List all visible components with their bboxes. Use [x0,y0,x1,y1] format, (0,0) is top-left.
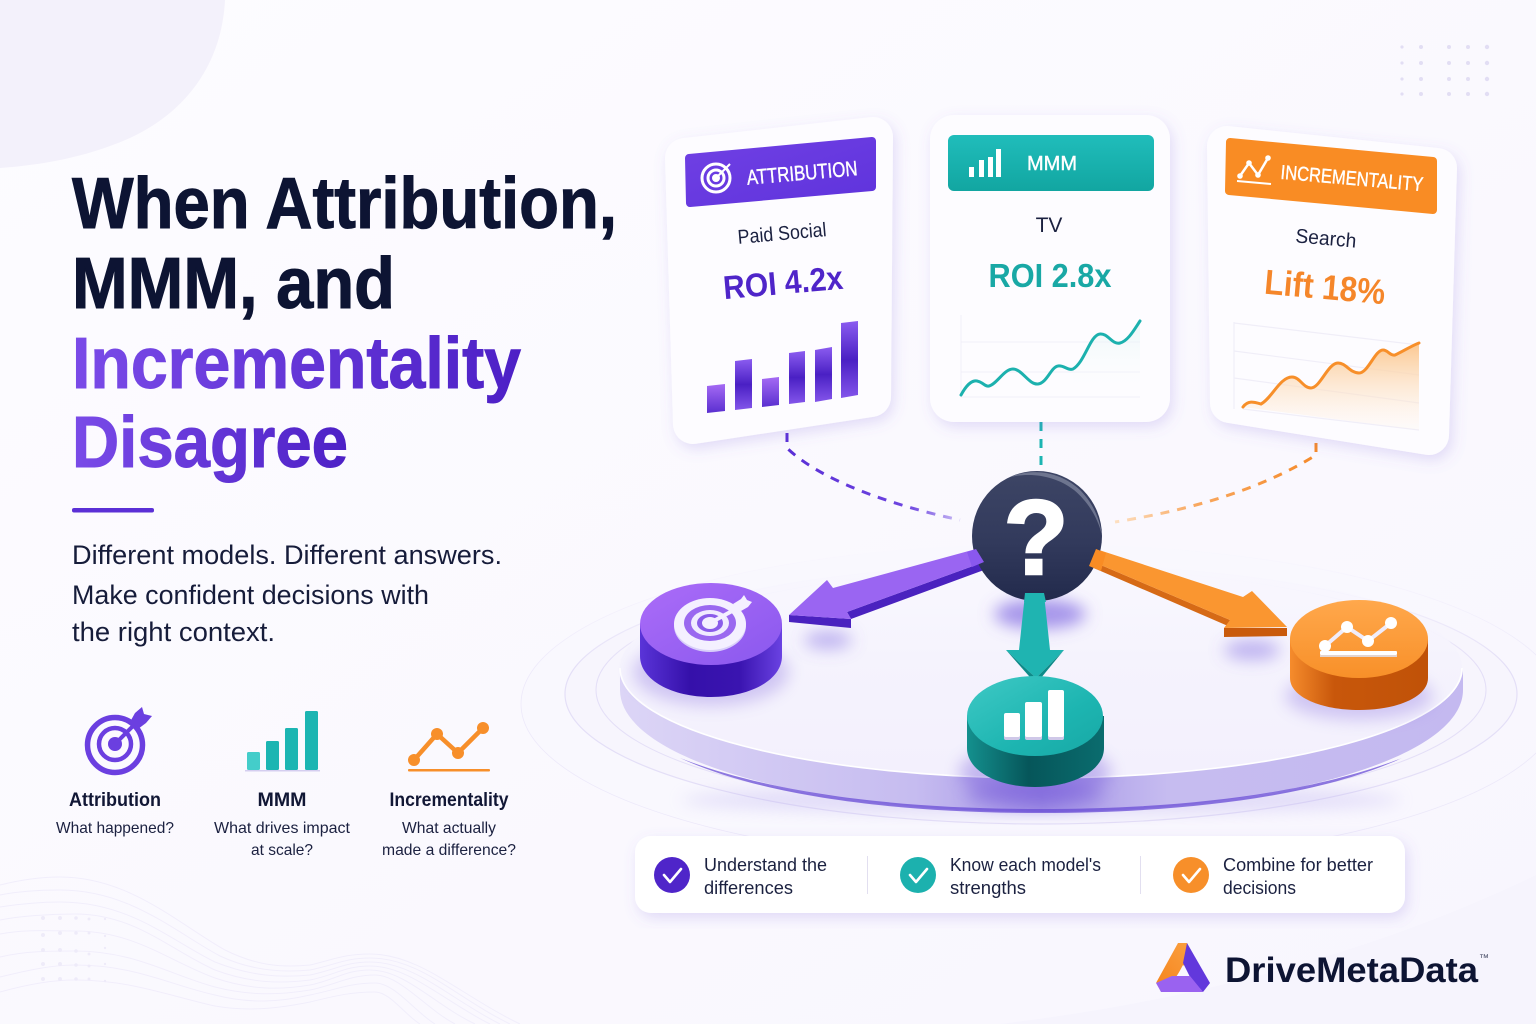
question mark: ? [1004,479,1068,597]
benefits panel [635,836,1405,913]
title: Incrementality [72,324,521,404]
node: mmm [959,676,1111,800]
benefit: combine: Combine for better [1223,855,1373,875]
header label: ATTRIBUTION [746,157,858,190]
header label: INCREMENTALITY [1280,162,1424,196]
label: Attribution [69,790,161,811]
metric: Lift 18% [1263,263,1387,312]
legend: attribution [56,707,174,837]
arrow shadows [804,599,1280,660]
arrow: orange [1089,549,1287,637]
card body [930,115,1170,422]
arrow: purple [789,549,984,628]
decorative wave lines [0,877,520,1024]
card body [685,137,873,424]
metric: ROI 4.2x [722,259,845,306]
card: attribution [685,137,873,424]
node: attribution [633,583,789,706]
logo mark [1156,943,1210,992]
title rule [72,508,154,512]
card header [1229,142,1433,210]
icon: line chart [408,722,490,772]
card body [1227,146,1437,435]
header icon: target [702,164,730,192]
description: What actually [402,820,496,837]
wordmark: DriveMetaData [1225,951,1479,990]
channel: Paid Social [737,219,827,249]
area chart [1234,322,1419,430]
benefit: strengths: strengths [950,878,1026,898]
subtitle text: the right context. [72,617,275,647]
node: incrementality [1285,600,1433,720]
card: mmm [930,115,1170,422]
title: Disagree [72,403,348,483]
legend: incrementality [382,722,516,859]
arrow stems over sphere edge [1024,593,1046,602]
card: incrementality [1227,142,1437,435]
icon: target [674,595,752,652]
decorative dot grid [1400,45,1489,96]
benefit: strengths [900,855,1101,898]
icon: bars [245,711,320,772]
benefit: understand [654,855,827,898]
connector dashes [787,422,1316,522]
bar chart [707,321,858,413]
benefit: strengths: Know each model's [950,855,1101,875]
question mark sphere [967,471,1106,602]
channel: TV [1036,214,1062,237]
header label: MMM [1027,153,1077,175]
card header [689,141,872,203]
subtitle text: Make confident decisions with [72,580,429,610]
platform [521,544,1536,864]
subtitle text: Different models. Different answers. [72,540,502,570]
description [214,820,351,859]
description: at scale? [251,842,313,859]
icon: line chart [1319,617,1397,657]
legend: mmm [214,711,351,859]
card header [948,135,1154,191]
description: made a difference? [382,842,516,859]
subtitle text [72,540,502,647]
icon: target [88,707,152,772]
arrow: teal [1006,594,1064,684]
label: MMM [258,790,306,811]
channel: Search [1295,225,1357,253]
decorative bottom-right blob [1000,875,1536,1024]
benefit: combine: decisions [1223,878,1296,898]
title: When Attribution, [72,164,617,244]
metric: ROI 2.8x [988,257,1112,294]
header icon: line chart [1237,155,1271,184]
description: What happened? [56,820,174,837]
benefit: combine [1173,855,1373,898]
decorative wave dots [41,916,106,982]
header icon: bars [969,149,1001,177]
trademark: ™ [1479,953,1489,964]
logo [1156,943,1489,992]
title: MMM, and [72,244,395,324]
benefit: understand: Understand the [704,855,827,875]
decorative corner blob [0,0,225,168]
title [72,164,617,483]
description [382,820,516,859]
icon: bars [1004,690,1064,740]
line chart [961,315,1140,397]
label: Incrementality [390,790,509,811]
benefit: understand: differences [704,878,793,898]
description: What drives impact [214,820,351,837]
